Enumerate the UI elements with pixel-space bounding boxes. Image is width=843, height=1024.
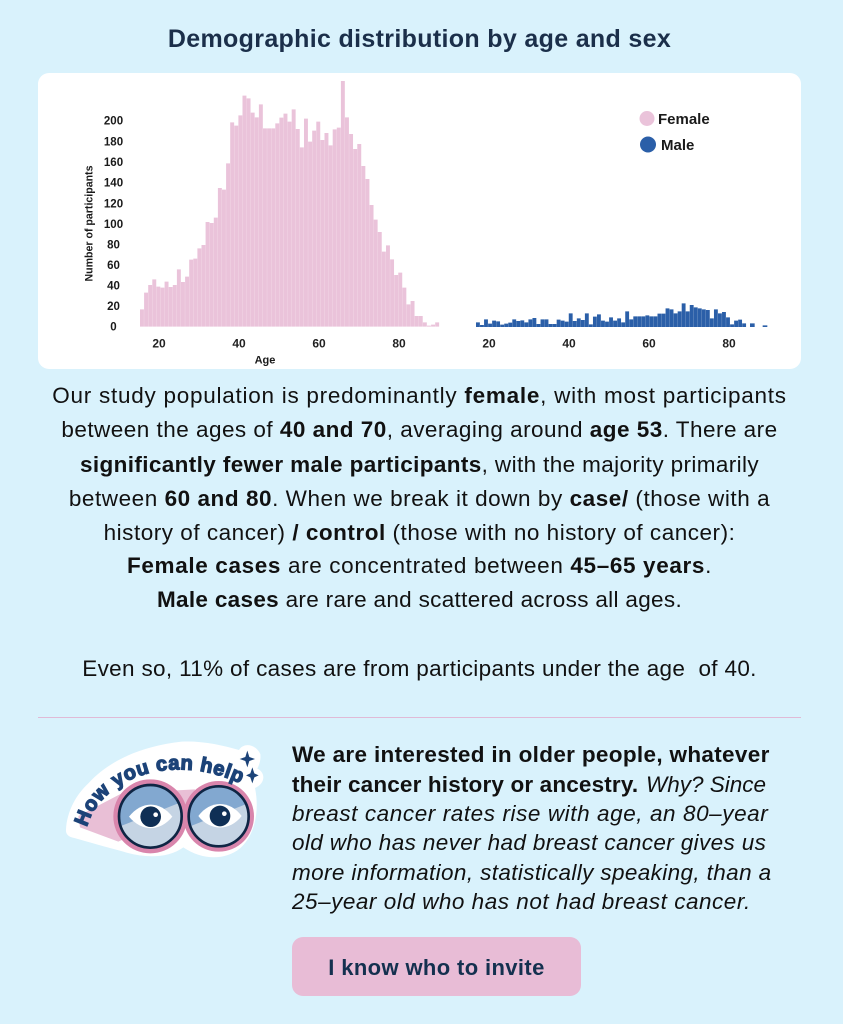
female x axis tick labels: 60 xyxy=(312,336,326,350)
y axis tick labels: 40 xyxy=(107,281,120,293)
text block: study population summary: Female cases are concentrated between 45–65 years. xyxy=(127,553,712,578)
male histogram bars xyxy=(476,303,767,327)
male x axis tick labels: 80 xyxy=(722,336,736,350)
legend: Male xyxy=(661,137,694,154)
title: Demographic distribution by age and sex xyxy=(168,25,671,53)
y axis tick labels: 140 xyxy=(104,178,123,190)
text block: call for older participants: more information, statistically speaking, than a xyxy=(292,860,771,885)
text block: call for older participants: Why? Since xyxy=(646,772,766,797)
y axis title: Number of participants xyxy=(84,165,96,281)
female x axis tick labels xyxy=(152,336,406,350)
text block: study population summary: history of cancer) / control (those with no history of cancer): xyxy=(104,520,735,545)
male x axis tick labels: 20 xyxy=(482,336,496,350)
left lens xyxy=(113,779,187,853)
legend: Female xyxy=(658,111,710,128)
y axis tick labels: 160 xyxy=(104,157,123,169)
panel: histogram chart xyxy=(38,73,801,369)
text block: study population summary: between the ages of 40 and 70, averaging around age 53. There are xyxy=(61,417,778,442)
light beam xyxy=(78,789,195,842)
male x axis tick labels xyxy=(482,336,736,350)
icon: how you can help binocular eyes sticker xyxy=(66,742,264,858)
y axis tick labels: 20 xyxy=(107,301,120,313)
text block: study population summary xyxy=(52,383,787,681)
y axis tick labels: 0 xyxy=(110,322,117,334)
button: I know who to invite xyxy=(292,937,581,996)
text block: call for older participants: their cancer history or ancestry. xyxy=(292,772,638,797)
y axis tick labels: 80 xyxy=(107,239,120,251)
legend xyxy=(640,111,710,154)
icon: sparkle stars xyxy=(240,751,259,783)
curved heading: how you can help: How you can help xyxy=(73,756,244,827)
y axis tick labels: 60 xyxy=(107,260,120,272)
chart: histograms of participants by age and sex xyxy=(84,81,768,366)
text block: study population summary: between 60 and 80. When we break it down by case/ (those with a xyxy=(69,486,770,511)
female x axis tick labels: 80 xyxy=(392,336,406,350)
text block: call for older participants: breast cancer rates rise with age, an 80–year xyxy=(292,801,768,826)
y axis tick labels: 200 xyxy=(104,116,123,128)
y axis tick labels: 180 xyxy=(104,136,123,148)
text block: call for older participants: 25–year old who has not had breast cancer. xyxy=(292,889,751,914)
y axis tick labels: 120 xyxy=(104,198,123,210)
y axis tick labels xyxy=(104,116,123,334)
text block: call for older participants xyxy=(292,742,771,914)
text block: study population summary: Male cases are rare and scattered across all ages. xyxy=(157,587,682,612)
text block: study population summary: Even so, 11% of cases are from participants under the age of 40. xyxy=(82,656,757,681)
divider xyxy=(38,717,801,718)
male x axis tick labels: 40 xyxy=(562,336,576,350)
female x axis tick labels: 20 xyxy=(152,336,166,350)
male x axis tick labels: 60 xyxy=(642,336,656,350)
female histogram bars xyxy=(140,81,439,327)
text block: study population summary: Our study population is predominantly female, with most participants xyxy=(52,383,787,408)
female x axis tick labels: 40 xyxy=(232,336,246,350)
x axis title: Age xyxy=(255,354,275,366)
y axis tick labels: 100 xyxy=(104,219,123,231)
text block: study population summary: significantly fewer male participants, with the majority primarily xyxy=(80,452,759,477)
sticker white backing xyxy=(66,742,263,857)
right lens xyxy=(183,780,255,852)
button: I know who to invite: I know who to invite xyxy=(328,955,545,980)
text block: call for older participants: old who has never had breast cancer gives us xyxy=(292,830,766,855)
text block: call for older participants: We are interested in older people, whatever xyxy=(292,742,770,767)
